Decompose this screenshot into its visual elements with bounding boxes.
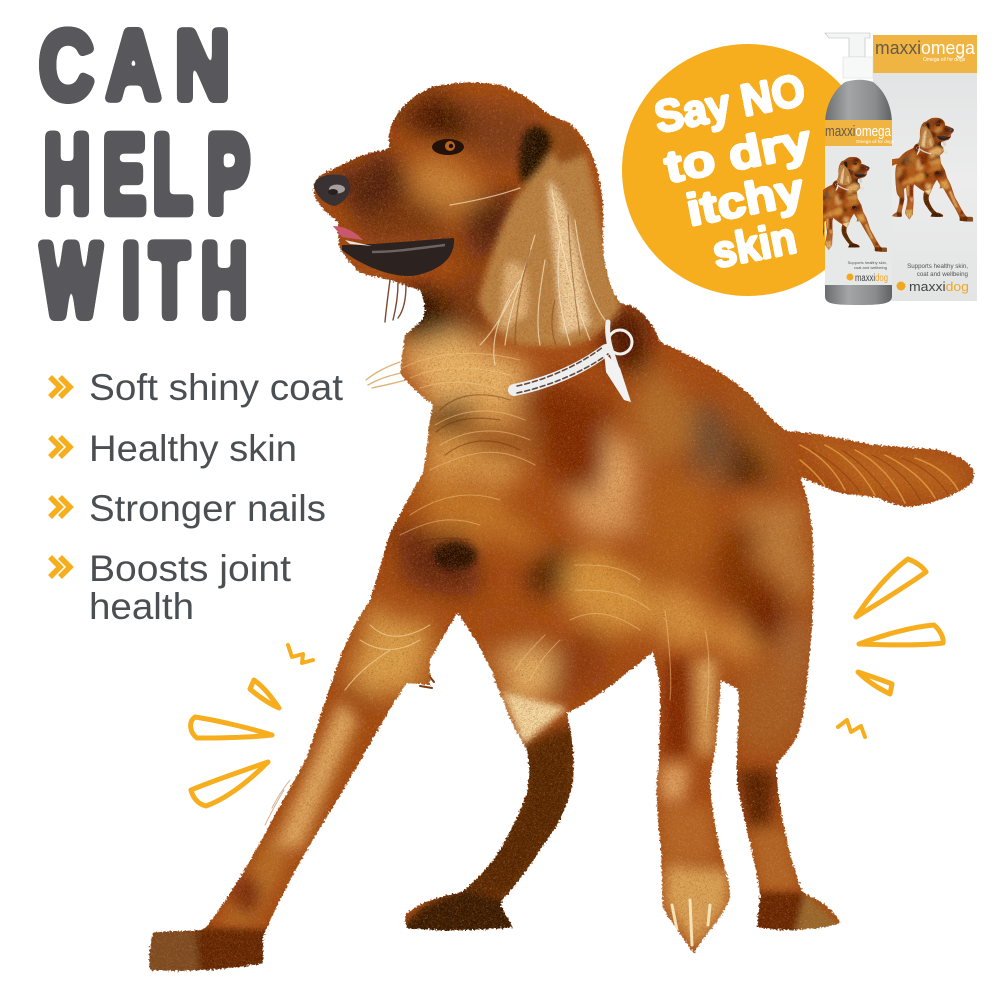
- item: boosts joint health: Boosts joint: [89, 548, 292, 589]
- eye: [432, 139, 464, 155]
- bullet: stronger nails: [50, 497, 70, 517]
- far leg: [455, 720, 580, 900]
- coat: [140, 70, 990, 980]
- product: box: maxxiomega: [875, 37, 976, 58]
- product: bottle: Omega oil for dogs: [856, 139, 895, 144]
- benefits list: [50, 367, 344, 627]
- fur wisps outside silhouette: [265, 280, 434, 825]
- neck and chest: [400, 285, 455, 340]
- bullet: healthy skin: [50, 437, 70, 457]
- product: box: maxxidog: [909, 279, 969, 294]
- product: box: coat and wellbeing: [917, 271, 969, 278]
- badge: say no to dry itchy skin: Say NO: [650, 64, 809, 143]
- title: can help with: WITH: [41, 223, 247, 339]
- item: boosts joint health: health: [89, 586, 194, 627]
- title: can help with: CAN: [39, 9, 230, 120]
- near leg top: [655, 591, 718, 650]
- light bib: [503, 692, 567, 745]
- dog illustration: [140, 70, 990, 980]
- product: box: Omega oil for dogs: [923, 57, 966, 63]
- long leg upper: [350, 610, 430, 700]
- badge: say no to dry itchy skin: [622, 44, 874, 296]
- tongue: [333, 226, 363, 240]
- mouth: [342, 238, 454, 276]
- long leg: [275, 700, 358, 850]
- badge: say no to dry itchy skin: to dry: [660, 115, 815, 193]
- hind lower leg: [737, 770, 775, 830]
- head tones: [398, 92, 445, 130]
- nose: [314, 174, 350, 206]
- product: bottle: maxxiomega: [825, 123, 892, 140]
- belly: [395, 528, 485, 595]
- hind quarters: [735, 500, 815, 600]
- product: bottle: [823, 32, 894, 305]
- product: bottle: Supports healthy skin,: [848, 260, 887, 265]
- bullet: boosts joint health: [50, 557, 70, 577]
- dark belly: [433, 542, 477, 570]
- item: healthy skin: Healthy skin: [89, 428, 297, 469]
- ear shadow: [519, 126, 553, 186]
- bullet: soft shiny coat: [50, 377, 70, 397]
- hair strands: [345, 188, 958, 945]
- title: can help with: HELP: [44, 113, 250, 236]
- badge: say no to dry itchy skin: itchy: [682, 163, 808, 236]
- product: box: [873, 35, 977, 301]
- product: bottle: coat and wellbeing: [854, 265, 887, 270]
- product: bottle: maxxidog: [855, 273, 888, 284]
- collar tag: [604, 352, 631, 402]
- badge: say no to dry itchy skin: skin: [708, 212, 800, 278]
- title: can help with: [39, 9, 250, 339]
- grain: [140, 70, 990, 980]
- near leg strips: [664, 660, 688, 755]
- product: box: Supports healthy skin,: [907, 263, 968, 270]
- paws: [400, 890, 518, 935]
- sparks: left: [191, 645, 313, 806]
- collar: [514, 322, 632, 393]
- item: soft shiny coat: Soft shiny coat: [89, 367, 344, 408]
- sparks: right: [838, 559, 943, 737]
- item: stronger nails: Stronger nails: [89, 488, 326, 529]
- tail: [790, 435, 970, 495]
- ear and blonde feathering: [478, 142, 622, 347]
